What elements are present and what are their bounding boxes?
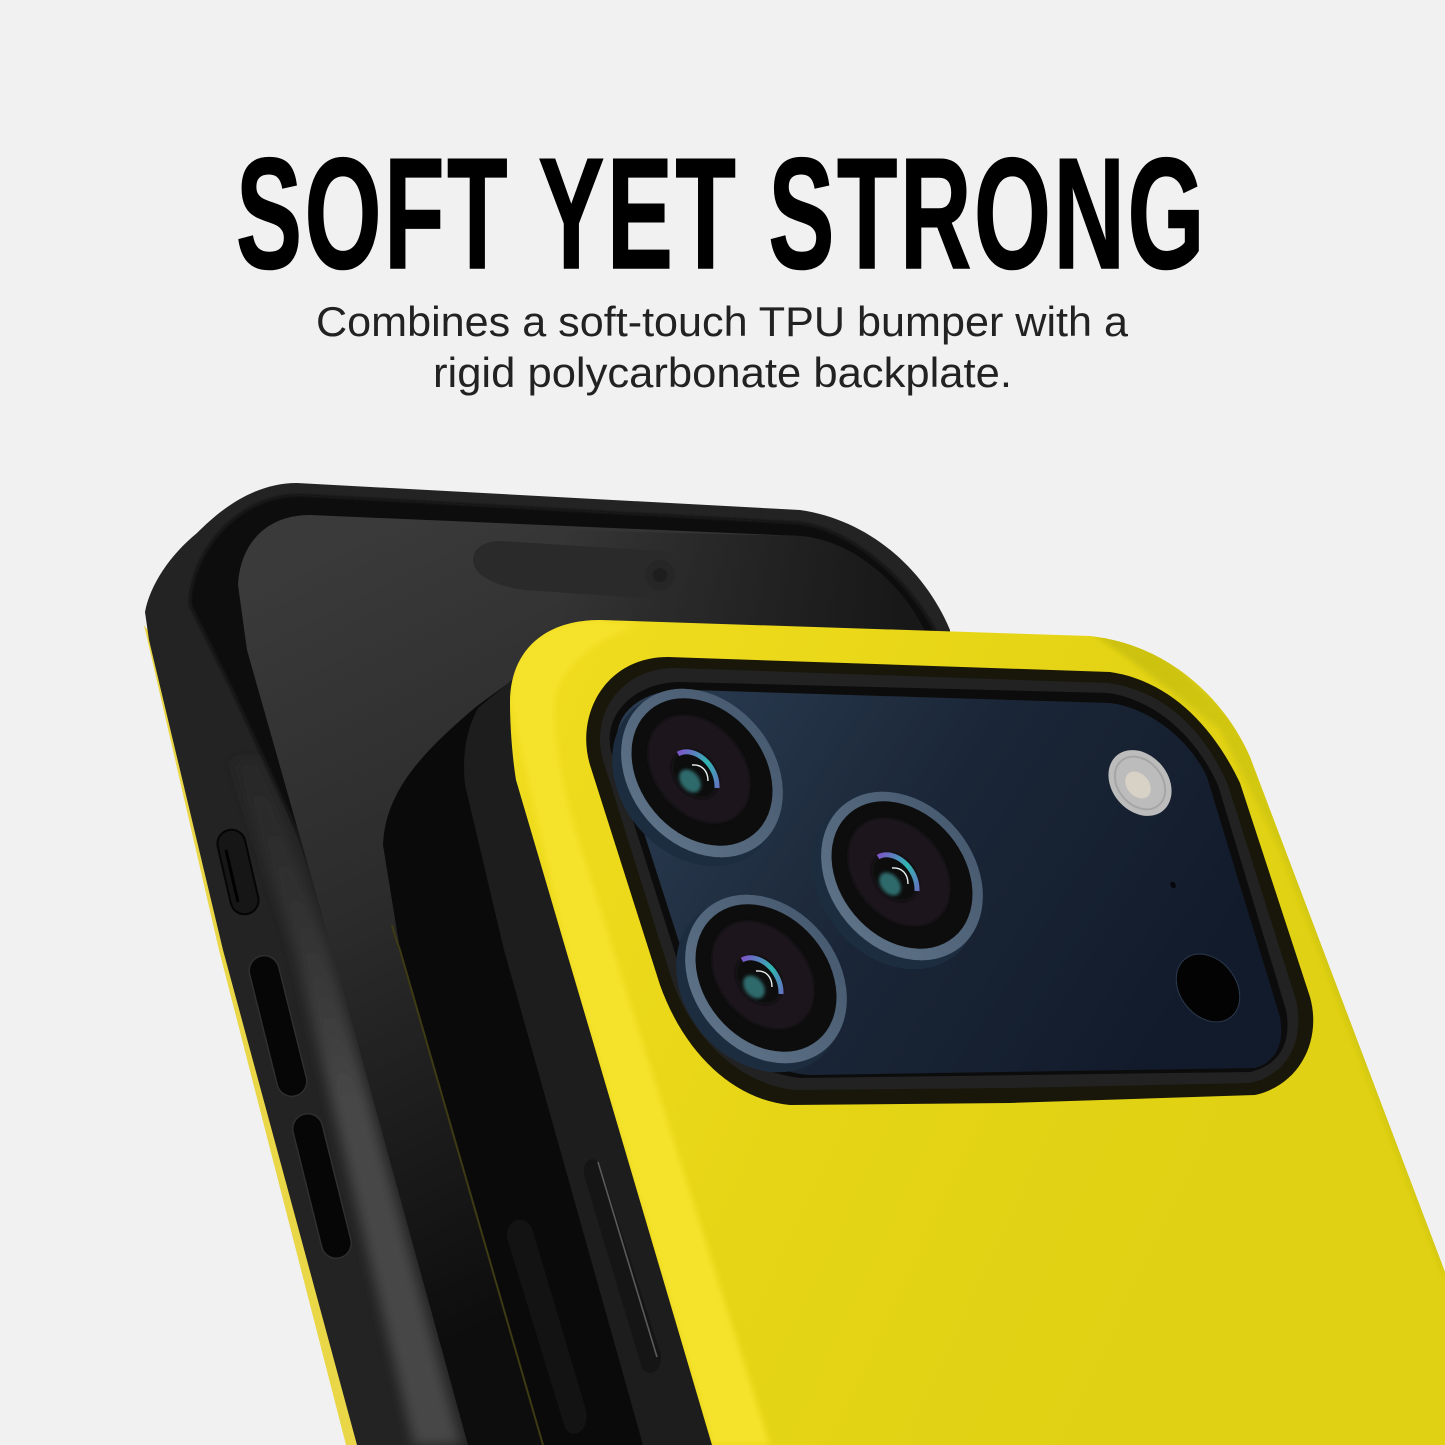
subtitle	[316, 298, 1129, 396]
front phone: back case	[383, 620, 1445, 1445]
back phone: screen side with black bumper	[144, 483, 950, 1445]
rim inner ring	[600, 668, 1298, 1090]
camera island rim	[586, 657, 1313, 1105]
volume up button	[246, 953, 310, 1099]
subtitle: Combines a soft-touch TPU bumper with a	[316, 298, 1129, 345]
phone screen	[238, 515, 925, 1445]
icon: mute switch	[215, 827, 261, 917]
camera glass	[617, 690, 1281, 1075]
black bumper	[145, 483, 950, 1445]
lens 2	[778, 759, 1016, 1003]
lens 1	[578, 656, 816, 900]
yellow highlights	[510, 620, 1445, 1445]
lens 3	[642, 862, 880, 1106]
subtitle: rigid polycarbonate backplate.	[433, 349, 1012, 396]
volume down button	[290, 1111, 354, 1261]
black side wall	[464, 665, 720, 1445]
ghost button on side	[507, 1220, 587, 1434]
yellow back plate	[510, 620, 1445, 1445]
screen inner lip	[190, 495, 935, 1000]
icon: flash	[1095, 737, 1185, 829]
dynamic island	[473, 541, 687, 599]
microphone dot	[1169, 881, 1177, 889]
rim shadow	[610, 682, 1288, 1078]
sensor hole	[1163, 942, 1253, 1034]
yellow sliver along left edge	[144, 625, 357, 1445]
side button	[584, 1159, 661, 1373]
bumper highlight band	[268, 836, 463, 1445]
camera plateau rear block	[383, 660, 720, 1445]
olive edge line	[392, 925, 543, 1445]
